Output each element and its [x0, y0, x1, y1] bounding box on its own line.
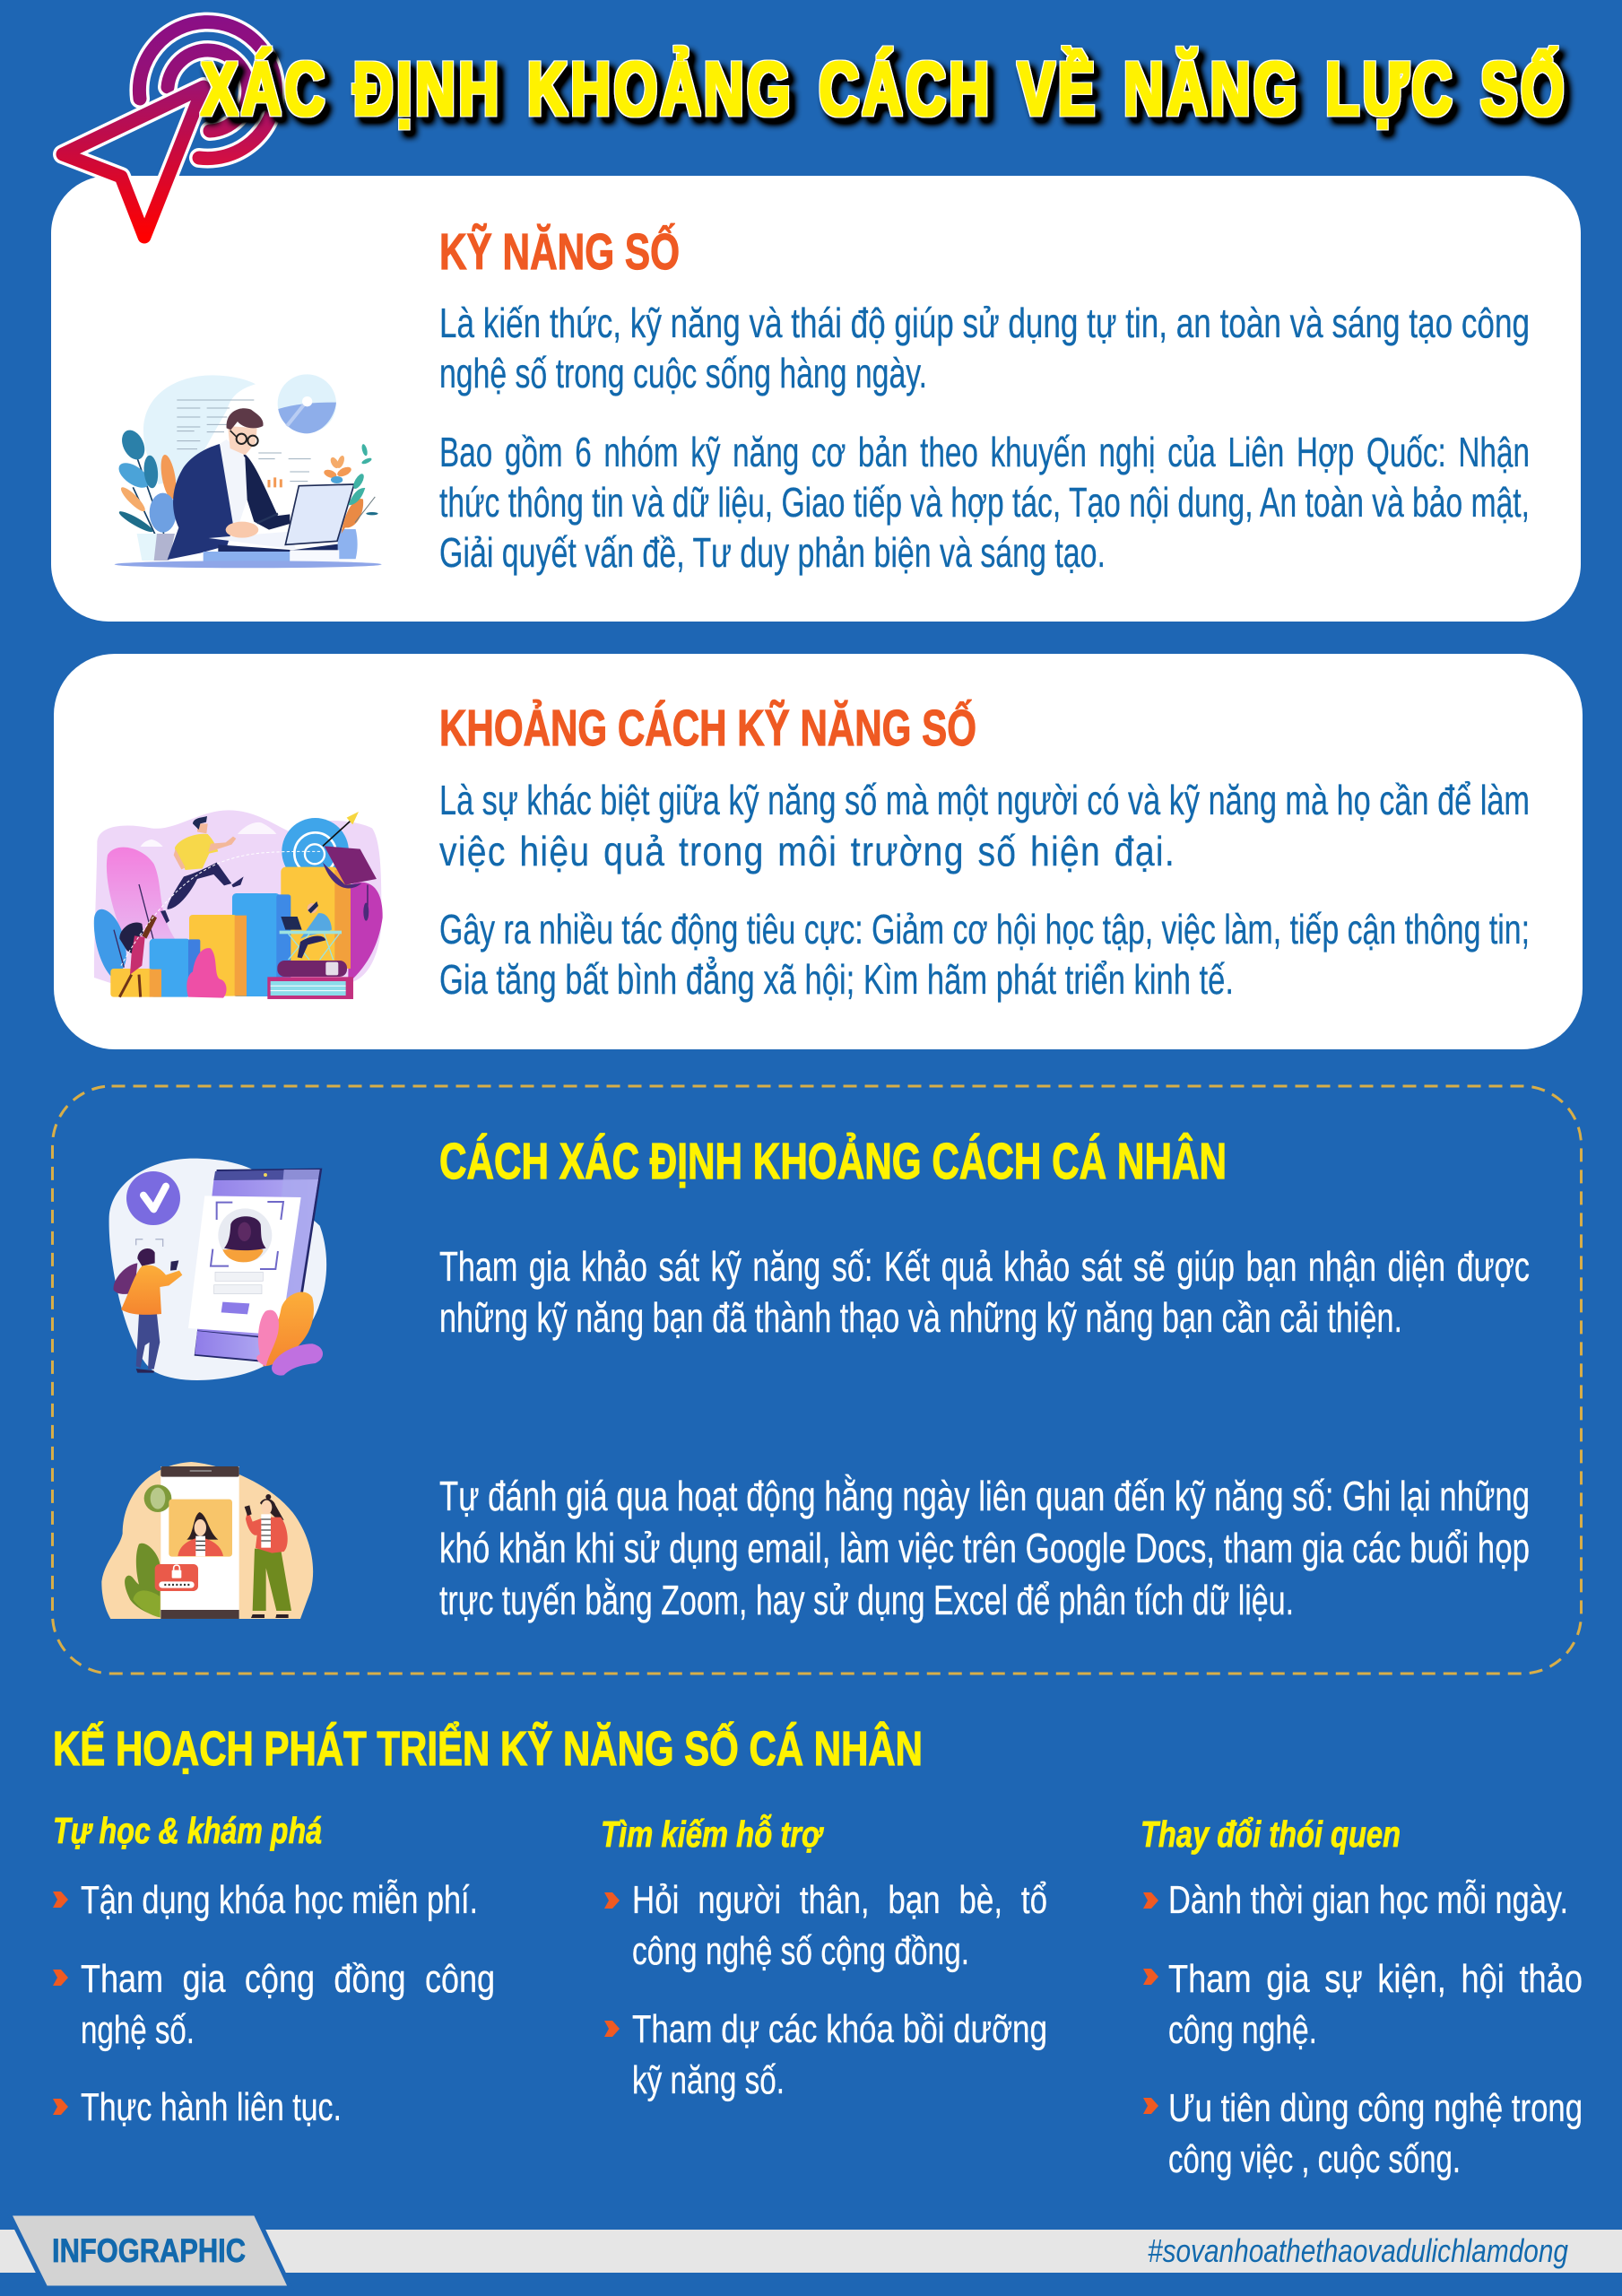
text block: negative impacts [439, 906, 1530, 1003]
text block: definition: nghệ số trong cuộc sống hàng ngày. [439, 350, 927, 396]
bullet: prioritize technology: công việc , cuộc sống. [1168, 2137, 1461, 2181]
subheading: Thay đổi thói quen [1141, 1813, 1401, 1855]
heading: cách xác định: CÁCH XÁC ĐỊNH KHOẢNG CÁCH CÁ NHÂN [439, 1132, 1227, 1190]
bullet: events [1143, 1957, 1583, 2052]
text block: self assessment: trực tuyến bằng Zoom, hay sử dụng Excel để phân tích dữ liệu. [439, 1577, 1294, 1623]
text block: negative impacts: Gia tăng bất bình đẳng xã hội; Kìm hãm phát triển kinh tế. [439, 956, 1234, 1003]
bullet: ask people [604, 1878, 1047, 1973]
text block: six skill groups [439, 429, 1530, 576]
heading: khoảng cách kỹ năng số: KHOẢNG CÁCH KỸ NĂNG SỐ [439, 699, 976, 757]
column: thay đổi thói quen [1141, 1813, 1583, 2181]
panel: cách xác định khoảng cách cá nhân [52, 1086, 1582, 1674]
footer tab [9, 2213, 291, 2288]
text block: gap definition [439, 777, 1530, 874]
bullet: ask people: công nghệ số cộng đồng. [632, 1929, 969, 1973]
text block: gap definition: việc hiệu quả trong môi trường số hiện đại. [439, 828, 1175, 874]
bullet: ask people: Hỏi người thân, bạn bè, tổ [632, 1878, 1047, 1922]
footer bar [0, 2213, 1622, 2288]
text block: self assessment [439, 1473, 1530, 1623]
text block: survey [439, 1243, 1530, 1341]
bullet: community [53, 1957, 495, 2052]
bullet: training courses [604, 2007, 1047, 2102]
column: tìm kiếm hỗ trợ [601, 1813, 1047, 2102]
subheading: Tự học & khám phá [53, 1810, 322, 1851]
text block: six skill groups: Giải quyết vấn đề, Tư duy phản biện và sáng tạo. [439, 529, 1106, 576]
icon: phone identity check [109, 1159, 326, 1380]
bullet: training courses: Tham dự các khóa bồi dưỡng [632, 2007, 1047, 2051]
section heading: kế hoạch phát triển: KẾ HOẠCH PHÁT TRIỂN KỸ NĂNG SỐ CÁ NHÂN [53, 1721, 923, 1776]
bullet: practice: Thực hành liên tục. [81, 2085, 342, 2129]
icon: climbing steps to a target [94, 810, 383, 999]
panel: khoảng cách kỹ năng số [54, 654, 1583, 1049]
panel: kỹ năng số [51, 176, 1581, 622]
text block: definition [439, 300, 1530, 396]
icon: man working at laptop [115, 374, 382, 568]
subheading: Tìm kiếm hỗ trợ [601, 1813, 825, 1855]
footer label: INFOGRAPHIC [52, 2232, 246, 2269]
bullet: events: công nghệ. [1168, 2008, 1317, 2052]
bullet: free courses: Tận dụng khóa học miễn phí. [81, 1878, 478, 1922]
bullet: prioritize technology [1143, 2086, 1583, 2181]
bullet: community: nghệ số. [81, 2008, 195, 2052]
heading: kỹ năng số: KỸ NĂNG SỐ [439, 222, 680, 281]
icon: phone with face and password [101, 1462, 313, 1619]
bullet: training courses: kỹ năng số. [632, 2058, 785, 2102]
icon: target rings and cursor arrow [63, 22, 275, 237]
column: tự học và khám phá [53, 1810, 495, 2129]
bullet: community: Tham gia cộng đồng công [81, 1957, 495, 2001]
